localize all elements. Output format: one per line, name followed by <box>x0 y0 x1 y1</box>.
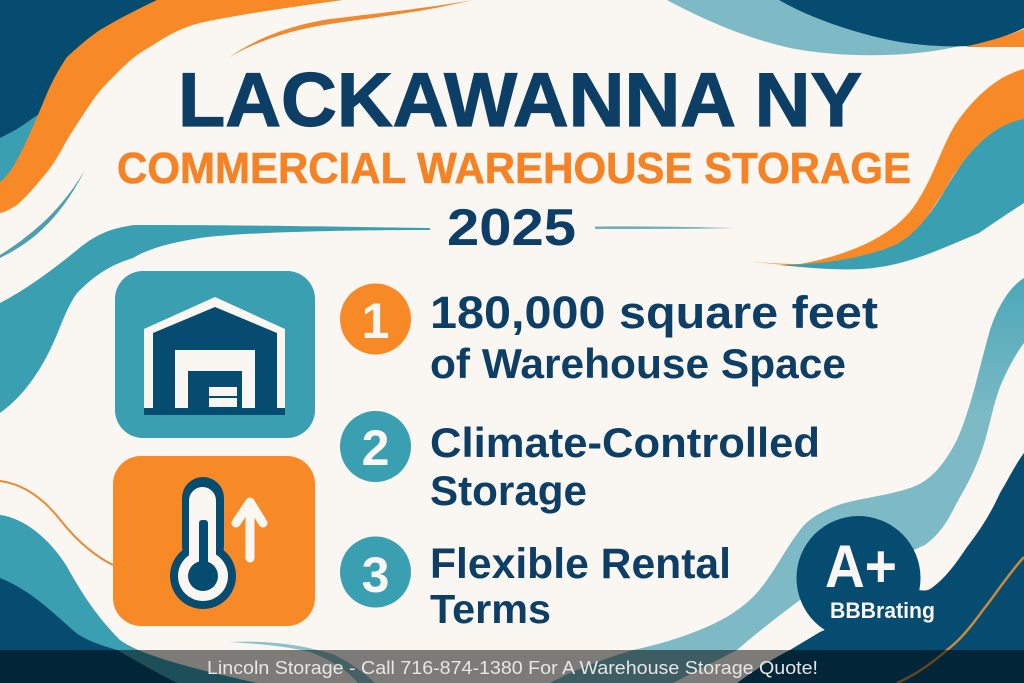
icon: thermometer tile <box>113 456 315 626</box>
subtitle: Commercial Warehouse Storage: COMMERCIAL WAREHOUSE STORAGE <box>117 144 911 193</box>
badge: number 2: 2 <box>362 420 389 476</box>
item 3 text <box>430 540 731 632</box>
item 2 text: Storage <box>430 467 587 514</box>
item 3 text: Terms <box>430 586 551 632</box>
item 2 text: Climate-Controlled <box>430 419 820 466</box>
badge: number 3: 3 <box>362 547 389 603</box>
year: 2025: 2025 <box>447 199 576 257</box>
badge: number 1: 1 <box>362 293 389 349</box>
item 1 text <box>430 287 878 387</box>
badge: number 3 <box>340 536 411 608</box>
badge: number 2 <box>340 411 411 482</box>
badge: A+ BBB rating <box>796 516 935 640</box>
item 1 text: 180,000 square feet <box>430 287 878 338</box>
title: Lackawanna NY: LACKAWANNA NY <box>178 58 862 143</box>
item 2 text <box>430 419 820 514</box>
icon: warehouse tile <box>115 271 315 438</box>
item 1 text: of Warehouse Space <box>430 340 846 387</box>
divider right of year <box>595 226 735 229</box>
badge: A+ BBB rating: BBBrating <box>830 598 935 623</box>
footer bar <box>0 650 1024 683</box>
footer bar: Lincoln Storage - Call 716-874-1380 For A Warehouse Storage Quote! <box>207 657 818 678</box>
item 3 text: Flexible Rental <box>430 540 731 588</box>
badge: A+ BBB rating: A+ <box>825 533 897 600</box>
badge: number 1 <box>340 284 411 354</box>
